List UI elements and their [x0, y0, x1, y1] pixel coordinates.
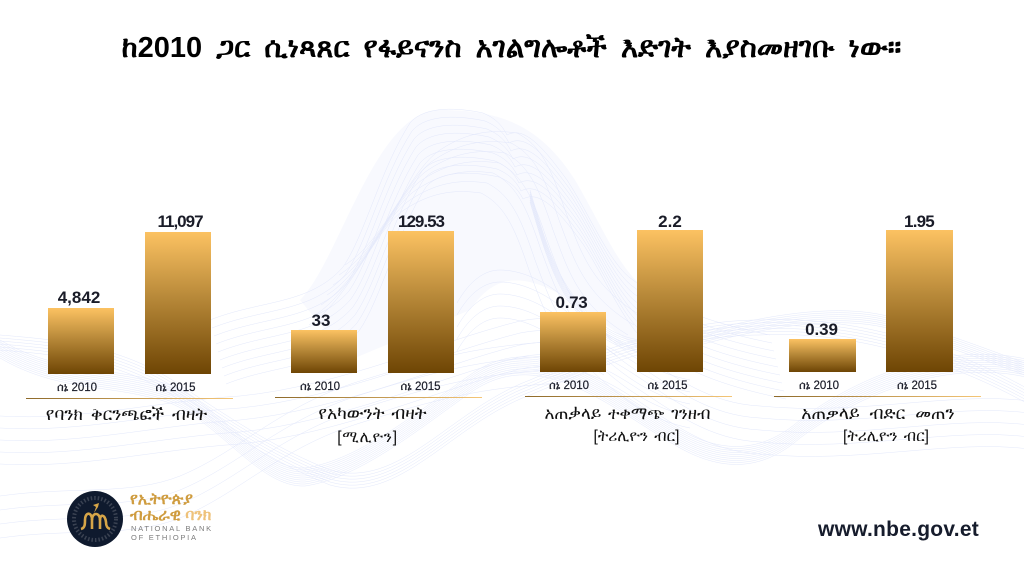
bar 2015	[388, 231, 454, 373]
panel name: አጠቃላይ ተቀማጭ ገንዘብ	[544, 404, 711, 423]
bar 2015	[145, 232, 211, 374]
amharic bank name: ብሔራዊ ባንክ	[130, 507, 211, 524]
logo: National Bank of Ethiopia	[67, 491, 213, 547]
panel: total loans	[774, 212, 981, 445]
website url: www.nbe.gov.et	[818, 518, 979, 541]
amharic bank name: የኢትዮጵያ	[130, 491, 193, 508]
bar 2010	[291, 330, 357, 373]
value 2015: 1.95	[904, 212, 934, 231]
divider	[26, 398, 233, 399]
bar 2015	[886, 230, 953, 372]
year label 2010: ሰኔ 2010	[57, 382, 97, 394]
value 2015: 11,097	[157, 212, 203, 231]
bar 2010	[789, 339, 856, 372]
divider	[774, 396, 981, 397]
divider	[275, 397, 482, 398]
icon: bank emblem	[67, 491, 123, 547]
year label 2015: ሰኔ 2015	[647, 380, 688, 392]
value 2010: 33	[312, 311, 330, 330]
english bank name: NATIONAL BANK	[131, 524, 213, 533]
panel name: አጠቃላይ ብድር መጠን	[801, 403, 955, 423]
amharic bank name	[130, 491, 211, 524]
english bank name	[131, 524, 213, 542]
panel: total deposits	[525, 212, 732, 445]
unit: [ትሪሊዮን ብር]	[843, 428, 929, 445]
english bank name: OF ETHIOPIA	[131, 532, 198, 542]
panel name: የአካውንት ብዛት	[318, 403, 427, 423]
bar 2010	[540, 312, 606, 372]
year label 2010: ሰኔ 2010	[300, 381, 340, 393]
value 2010: 0.73	[556, 293, 587, 312]
year label 2010: ሰኔ 2010	[799, 380, 839, 392]
divider	[525, 396, 732, 397]
unit: [ሚሊዮን]	[337, 429, 398, 446]
value 2015: 2.2	[658, 212, 682, 231]
title: ከ2010 ጋር ሲነጻጸር የፋይናንስ አገልግሎቶች እድገት እያስመዘገቡ ነው።	[122, 32, 901, 64]
panel: bank branches	[26, 212, 233, 424]
unit: [ትሪሊዮን ብር]	[594, 428, 679, 445]
bar 2010	[48, 308, 114, 374]
year label 2010: ሰኔ 2010	[549, 380, 589, 392]
panel name: የባንክ ቅርንጫፎች ብዛት	[46, 404, 207, 424]
value 2010: 4,842	[58, 288, 100, 307]
year label 2015: ሰኔ 2015	[155, 382, 196, 394]
value 2010: 0.39	[805, 320, 838, 339]
bar 2015	[637, 230, 703, 372]
panel: accounts	[275, 212, 482, 446]
year label 2015: ሰኔ 2015	[897, 380, 937, 392]
value 2015: 129.53	[398, 212, 444, 231]
year label 2015: ሰኔ 2015	[400, 381, 441, 393]
